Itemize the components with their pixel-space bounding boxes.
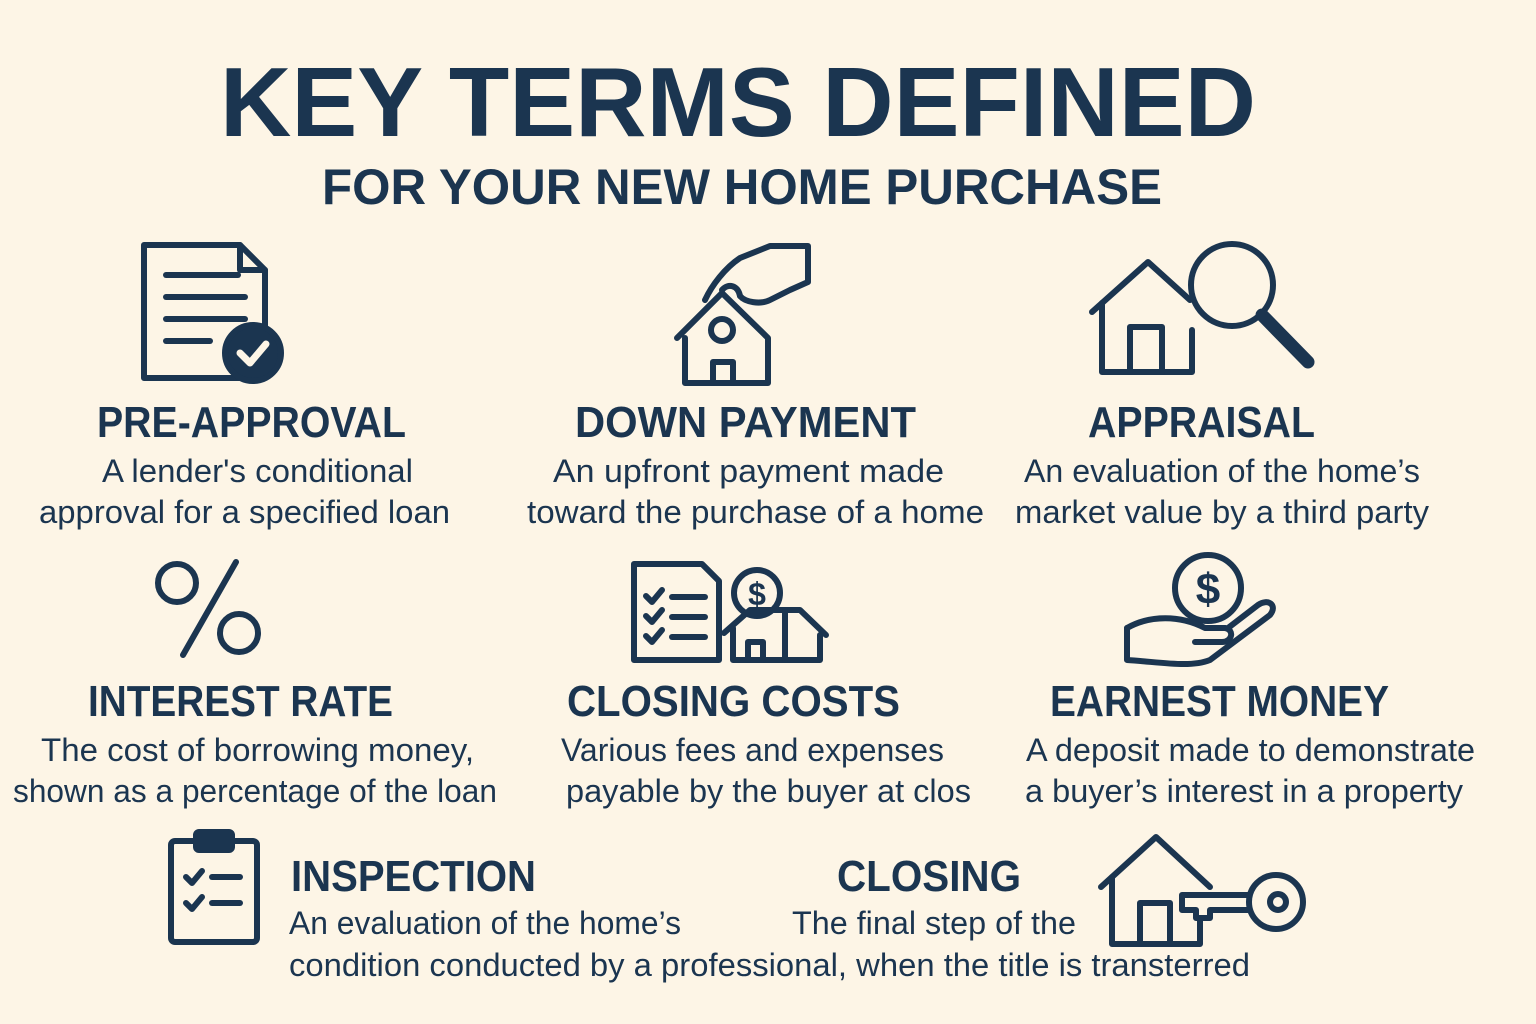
panel: down payment: DOWN PAYMENT [575,398,916,447]
icon: clipboard [171,832,257,942]
panel: earnest money: a buyer’s interest in a property [1025,773,1463,809]
panel: interest rate: shown as a percentage of the loan [13,773,497,809]
panel: appraisal: APPRAISAL [1088,398,1315,447]
icon: document with check [144,245,281,381]
panel: closing costs: payable by the buyer at clos [566,773,971,809]
panel: inspection: condition conducted by a professional, when the title is transterred [289,947,1250,983]
panel: closing: The final step of the [792,905,1076,941]
panel: earnest money: EARNEST MONEY [1050,677,1389,726]
panel: closing [792,852,1076,941]
icon: hand over house [677,246,808,383]
title: KEY TERMS DEFINED [220,47,1256,157]
icon: hand with coin: $ [1196,565,1220,614]
panel: inspection: INSPECTION [291,852,536,901]
panel: inspection: An evaluation of the home’s [289,905,681,941]
panel: interest rate: INTEREST RATE [88,677,393,726]
icon: house with key [1101,837,1303,944]
panel: closing costs: Various fees and expenses [561,732,944,768]
panel: pre-approval: approval for a specified loan [39,494,450,530]
subtitle: FOR YOUR NEW HOME PURCHASE [322,159,1162,215]
panel: interest rate [13,677,497,809]
panel: interest rate: The cost of borrowing money, [41,732,474,768]
panel: appraisal: market value by a third party [1015,494,1429,530]
panel: earnest money [1025,677,1475,809]
icon: percent [158,562,258,655]
panel: pre-approval: PRE-APPROVAL [97,398,406,447]
icon: checklist with coin and house: $ [748,576,766,612]
panel: appraisal [1015,398,1429,530]
panel: earnest money: A deposit made to demonstrate [1026,732,1475,768]
icon: hand with coin [1127,555,1273,664]
panel: closing: CLOSING [837,852,1021,901]
panel: down payment: An upfront payment made [553,453,944,489]
icon: house with magnifier [1092,244,1308,372]
panel: down payment: toward the purchase of a home [527,494,984,530]
icon: checklist with coin and house [634,564,826,660]
panel: down payment [527,398,984,530]
panel: closing costs [561,677,971,809]
panel: closing costs: CLOSING COSTS [567,677,900,726]
panel: inspection [289,852,1250,983]
panel: appraisal: An evaluation of the home’s [1024,453,1420,489]
panel: pre-approval: A lender's conditional [102,453,413,489]
panel: pre-approval [39,398,450,530]
